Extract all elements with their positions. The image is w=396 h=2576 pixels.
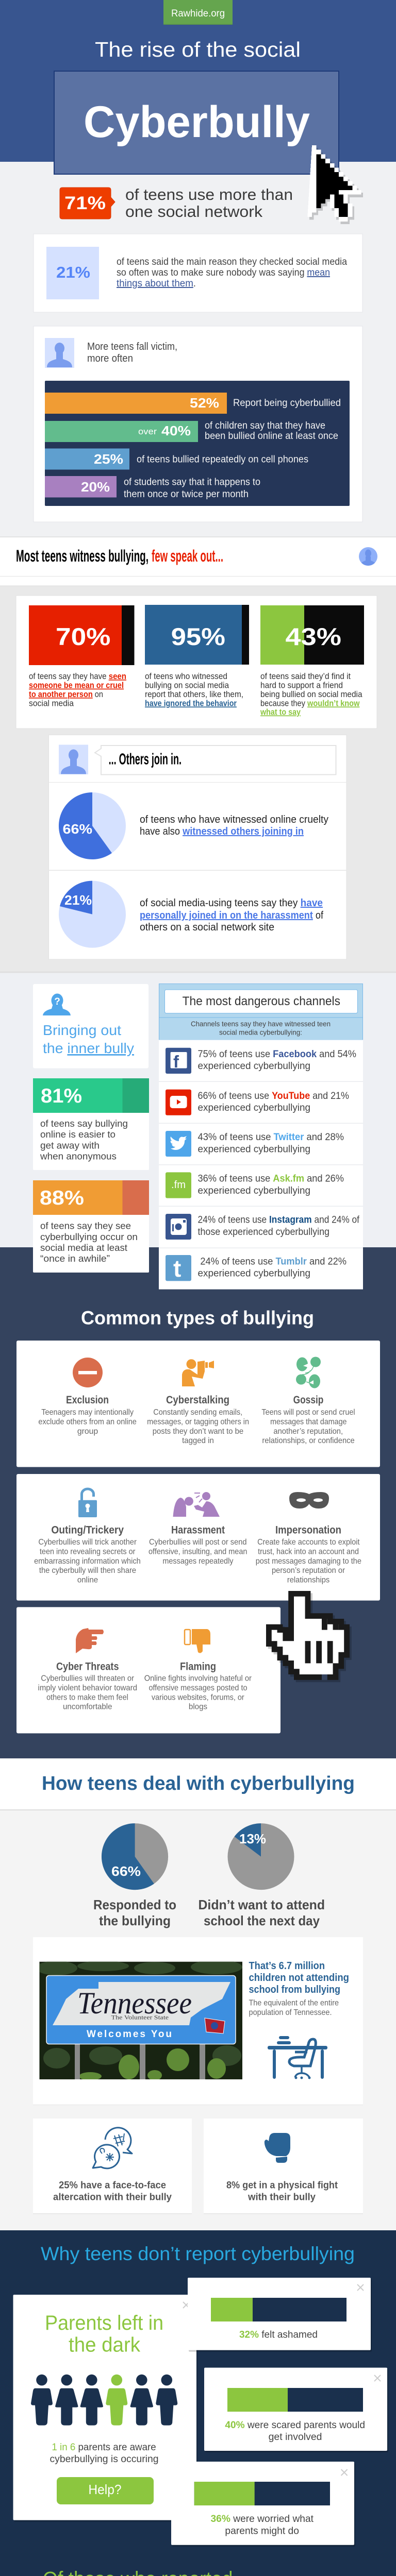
section: inner bully background — [0, 972, 396, 1248]
channel: Twitter — [166, 1131, 344, 1157]
stat card: 81 percent: get away with — [40, 1140, 100, 1150]
stat: 95 percent: 95% — [171, 623, 225, 650]
stat: 43 percent: being bullied on social media — [260, 690, 362, 699]
section: why teens don't report background — [0, 2230, 396, 2576]
text: physical fight — [226, 2179, 338, 2203]
channel: Ask.fm: experienced cyberbullying — [198, 1185, 310, 1196]
channels header — [159, 984, 363, 1040]
channels header: Channels teens say they have witnessed teen — [191, 1020, 331, 1028]
panel: physical fight — [204, 2119, 363, 2214]
text: flaming: offensive messages posted to — [148, 1684, 248, 1692]
channel: Twitter: 43% of teens use Twitter and 28% — [198, 1132, 344, 1143]
text: cyberstalking: Constantly sending emails, — [153, 1408, 242, 1417]
channels header: social media cyberbullying: — [219, 1028, 302, 1037]
icon: word of mouth — [296, 1357, 321, 1388]
title box: Cyberbully: Cyberbully — [84, 97, 310, 147]
pie chart: responded 66 percent: 66% — [111, 1863, 141, 1879]
section heading band: how teens deal — [0, 1758, 396, 1810]
panel: 21 percent card: 21% — [56, 263, 90, 281]
icon: arrow cursor — [307, 145, 363, 224]
panel: 21 percent card: so often was to make sure nobody was saying mean — [117, 267, 330, 278]
icon: unlocked padlock — [78, 1489, 97, 1517]
text: cyberstalking: posts they don’t want to be — [153, 1427, 243, 1436]
type: cyberstalking — [147, 1359, 249, 1445]
text: exclusion: Exclusion — [66, 1394, 109, 1406]
stat: 95 percent: have ignored the behavior — [145, 699, 237, 708]
brand tab: Rawhide.org — [171, 8, 225, 19]
type: cyber threats — [38, 1628, 137, 1711]
section: common types background — [0, 1247, 396, 1758]
channels list background — [159, 1040, 363, 1290]
title box: Cyberbully — [54, 71, 339, 174]
text: witnessed others joining in: of teens who have witnessed online cruelty — [140, 814, 328, 825]
icon: desk and chair — [268, 2036, 327, 2079]
pie chart: school avoidance 13 percent — [198, 1823, 325, 1928]
icon: abuse figures — [173, 1492, 220, 1517]
bar chart: victim rates: Report being cyberbullied — [233, 398, 341, 409]
channel: Ask.fm: .fm — [171, 1179, 186, 1191]
photo: Tennessee welcome sign: Tennessee — [77, 1986, 192, 2020]
text: cyber threats: imply violent behavior toward — [38, 1684, 137, 1692]
bar chart: victim rates: over — [138, 427, 157, 436]
panel: witness stats — [16, 596, 377, 728]
text: exclusion: Teenagers may intentionally — [41, 1408, 134, 1417]
icon: boxing glove — [265, 2133, 290, 2163]
stat text: more than one network — [125, 185, 293, 221]
channel: YouTube — [166, 1090, 349, 1115]
stat: 95 percent: bullying on social media — [145, 681, 229, 690]
pie chart: school avoidance 13 percent: Didn’t want to attend — [198, 1897, 325, 1912]
panel: 36 percent worried: 36% were worried what — [210, 2514, 314, 2524]
text: one in six parents: 1 in 6 parents are aware — [52, 2442, 156, 2453]
stat card: 81 percent: online is easier to — [40, 1129, 116, 1140]
panel: bullying types row 2 — [16, 1474, 380, 1601]
stat: 70 percent — [29, 605, 134, 708]
pie chart: 21 percent — [59, 881, 126, 948]
text: outing/trickery: Outing/Trickery — [51, 1524, 124, 1536]
icon: photographer — [182, 1359, 214, 1386]
channel: Instagram: 24% of teens use Instagram and 24% of — [198, 1215, 360, 1226]
text: 6.7 million children: The equivalent of the entire — [249, 1999, 339, 2007]
victims text: More teens fall victim, — [87, 341, 177, 352]
icon row: family of six — [31, 2375, 177, 2426]
channels header: The most dangerous channels — [183, 994, 340, 1008]
pie chart: responded 66 percent — [93, 1823, 176, 1928]
bar chart: victim rates: 20% — [81, 479, 110, 495]
text: outing/trickery: Cyberbullies will trick another — [38, 1538, 137, 1547]
text: outing/trickery: embarrassing information which — [34, 1557, 141, 1566]
heading: parents left in the dark: the dark — [69, 2334, 141, 2357]
text: outing/trickery: teen into revealing secrets or — [40, 1548, 136, 1556]
text: cyber threats: others to make them feel — [46, 1693, 128, 1702]
victims text — [87, 341, 177, 364]
bar chart: victim rates: 52% — [190, 395, 219, 411]
panel: bullying types row 1 — [16, 1341, 380, 1467]
stat: 71 percent badge: 71% — [64, 193, 106, 213]
icon: avatar — [59, 745, 88, 774]
panel: 40 percent scared parents: get involved — [269, 2432, 322, 2443]
text: 6.7 million children: children not attending — [249, 1972, 349, 1984]
panel: Tennessee comparison — [33, 1937, 363, 2105]
channel: Facebook: experienced cyberbullying — [198, 1061, 310, 1072]
channel: Facebook — [166, 1048, 356, 1074]
panel: most dangerous channels — [159, 984, 363, 1290]
text: 6.7 million children: population of Tennessee. — [249, 2008, 332, 2017]
text: face-to-face — [53, 2179, 172, 2203]
text: 6.7 million children: That’s 6.7 million — [249, 1960, 325, 1972]
text: outing/trickery — [34, 1524, 141, 1585]
panel: 32 percent felt ashamed: 32% felt ashamed — [239, 2330, 318, 2341]
brand tab — [163, 0, 233, 25]
stat: 43 percent: what to say — [260, 708, 301, 717]
text: cyber threats: Cyberbullies will threaten or — [41, 1674, 135, 1683]
panel: victims card — [34, 326, 362, 522]
stat card: 81 percent: of teens say bullying — [40, 1118, 128, 1129]
icon: pointing hand — [76, 1628, 104, 1653]
text: impersonation: Impersonation — [275, 1524, 341, 1536]
stat: 95 percent: of teens who witnessed — [145, 672, 227, 681]
bar chart: victim rates: been bullied online at least once — [205, 431, 338, 442]
icon: no entry — [73, 1358, 103, 1387]
speech bubble heading: ... Others join in. — [109, 750, 182, 768]
bar chart: victim rates: of children say that they have — [205, 420, 325, 431]
text: face-to-face: altercation with their bully — [53, 2192, 172, 2203]
stat text: more than one network: of teens use more than — [125, 185, 293, 204]
text: witnessed others joining in — [140, 814, 328, 837]
icon: thumbs down — [185, 1629, 210, 1653]
section: how teens deal background — [0, 1809, 396, 2230]
panel: 32 percent felt ashamed — [188, 2278, 372, 2352]
channel: Ask.fm — [166, 1172, 344, 1198]
type: harassment — [148, 1492, 248, 1566]
panel: 21 percent card — [34, 234, 362, 312]
photo: Tennessee welcome sign: Welcomes You — [87, 2029, 172, 2040]
text: physical fight: 8% get in a physical fight — [226, 2179, 338, 2191]
stat: 70 percent: 70% — [56, 623, 110, 650]
text: personally joined in: of social media-using teens say they have — [140, 897, 323, 909]
section: header background — [0, 0, 396, 162]
heading text — [43, 1022, 134, 1056]
bar chart: victim rates: of teens bullied repeatedly on cell phones — [137, 454, 308, 465]
title line: The rise of the social — [95, 38, 301, 61]
text: physical fight: with their bully — [248, 2192, 316, 2203]
icon: avatar — [45, 338, 74, 368]
icon: arguing speech bubbles — [93, 2128, 132, 2168]
stat card: 81 percent: when anonymous — [40, 1151, 117, 1161]
text: flaming: blogs — [189, 1703, 207, 1711]
text: gossip: another’s reputation, — [273, 1427, 343, 1436]
panel: others join in — [48, 735, 346, 959]
text: exclusion: exclude others from an online — [38, 1418, 137, 1427]
icon: mask — [289, 1492, 329, 1509]
stat: 43 percent — [260, 605, 364, 717]
stat card: 88 percent — [33, 1180, 149, 1273]
text: impersonation — [256, 1524, 361, 1585]
text: 6.7 million children: school from bullying — [249, 1984, 340, 1995]
stat: 95 percent: report that others, like them, — [145, 690, 243, 699]
pie chart: school avoidance 13 percent: school the next day — [204, 1913, 320, 1928]
heading text: Bringing out — [43, 1022, 121, 1038]
panel: 40 percent scared parents: 40% were scared parents would — [225, 2420, 365, 2431]
stat: 70 percent: someone be mean or cruel — [29, 681, 124, 690]
type: outing/trickery — [34, 1489, 141, 1585]
panel: bullying types row 3 — [16, 1607, 280, 1733]
heading: parents left in the dark: Parents left in — [45, 2312, 163, 2334]
channel: Instagram: those experienced cyberbullying — [198, 1227, 329, 1238]
stat: 70 percent: to another person on — [29, 690, 103, 699]
stat card: 81 percent — [33, 1078, 149, 1170]
button: help — [57, 2477, 154, 2504]
text: witnessed others joining in: have also witnessed others joining in — [140, 826, 304, 837]
heading: common types of bullying: Common types of bullying — [81, 1308, 314, 1329]
heading: why teens don't report: Why teens don’t report cyberbullying — [41, 2243, 355, 2264]
channel: Ask.fm: 36% of teens use Ask.fm and 26% — [198, 1174, 344, 1184]
text: cyberstalking: Cyberstalking — [166, 1394, 229, 1406]
photo: Tennessee welcome sign — [36, 1960, 242, 2080]
text: cyberstalking: tagged in — [182, 1436, 214, 1445]
victims text: more often — [87, 353, 133, 364]
text: impersonation: Create fake accounts to exploit — [257, 1538, 360, 1547]
stat card: 88 percent: social media at least — [40, 1242, 127, 1253]
text: exclusion: group — [77, 1427, 98, 1436]
text: face-to-face: 25% have a face-to-face — [59, 2179, 166, 2191]
stat: 43 percent: 43% — [286, 623, 341, 650]
text: cyberstalking: messages, or tagging others in — [147, 1418, 249, 1427]
pie chart: 21 percent: 21% — [64, 892, 92, 908]
stat: 43 percent: hard to support a friend — [260, 681, 343, 690]
stat: 43 percent: of teens said they’d find it — [260, 672, 351, 681]
text: cyber threats: Cyber Threats — [56, 1661, 119, 1673]
text: impersonation: relationships — [287, 1576, 329, 1585]
panel: 36 percent worried — [171, 2462, 355, 2547]
text: harassment: Harassment — [171, 1524, 225, 1536]
type: flaming — [144, 1629, 252, 1711]
text: flaming: various websites, forums, or — [152, 1693, 244, 1702]
stat card: 81 percent: 81% — [41, 1085, 82, 1107]
photo: Tennessee welcome sign: The Volunteer State — [111, 2013, 169, 2021]
channel: YouTube: experienced cyberbullying — [198, 1103, 310, 1113]
channel: YouTube: 66% of teens use YouTube and 21% — [198, 1091, 349, 1101]
text: impersonation: post messages damaging to the — [256, 1557, 361, 1566]
panel: 21 percent card: things about them. — [117, 278, 196, 289]
bar chart: victim rates: 25% — [94, 451, 123, 467]
text: one in six parents: cyberbullying is occuring — [50, 2454, 159, 2465]
channel: Tumblr: 24% of teens use Tumblr and 22% — [200, 1256, 346, 1267]
panel: parents left in the dark — [13, 2295, 197, 2522]
stat card: 88 percent: 88% — [40, 1187, 84, 1209]
text: 6.7 million children — [249, 1960, 349, 2017]
stat: 95 percent — [145, 605, 249, 708]
text: harassment: offensive, insulting, and mean — [148, 1548, 248, 1556]
panel: 40 percent scared parents — [204, 2368, 388, 2452]
text: impersonation: trust, hack into an account and — [258, 1548, 359, 1556]
close mark — [183, 2302, 189, 2308]
panel: 21 percent card: of teens said the main reason they checked social media — [117, 257, 347, 267]
text: exclusion — [38, 1394, 137, 1436]
text: flaming: Flaming — [180, 1661, 216, 1673]
icon: head with question mark: ? — [54, 996, 60, 1007]
bar chart: victim rates: 40% — [161, 423, 191, 438]
channel: Twitter: experienced cyberbullying — [198, 1144, 310, 1155]
section heading band: most teens witness bullying: Most teens witness bullying, — [16, 547, 148, 565]
stat: 43 percent: because they wouldn’t know — [260, 699, 360, 708]
pie chart: school avoidance 13 percent: 13% — [239, 1831, 266, 1846]
text: cyber threats: uncomfortable — [63, 1703, 112, 1711]
text: personally joined in: others on a social network site — [140, 922, 274, 933]
panel: face-to-face altercation — [33, 2119, 192, 2214]
icon: round avatar — [359, 547, 377, 567]
text: personally joined in: personally joined in on the harassment of — [140, 910, 323, 921]
pie chart: 66 percent — [59, 792, 126, 859]
icon: head with question mark — [43, 993, 71, 1015]
text: gossip: messages that damage — [270, 1418, 347, 1427]
text: flaming: Online fights involving hateful or — [144, 1674, 252, 1683]
icon: pixel hand cursor — [269, 1594, 349, 1680]
text: gossip: relationships, or confidence — [262, 1436, 355, 1445]
section heading band: most teens witness bullying: few speak out... — [152, 547, 223, 565]
text: gossip: Teens will post or send cruel — [261, 1408, 355, 1417]
stat: 70 percent: social media — [29, 699, 74, 708]
text: harassment — [148, 1524, 248, 1566]
stat: 70 percent: of teens say they have seen — [29, 672, 126, 681]
type: impersonation — [256, 1492, 361, 1585]
type: gossip — [261, 1357, 355, 1445]
text: gossip — [261, 1394, 355, 1445]
stat text: more than one network: one social network — [125, 202, 263, 221]
section heading band: most teens witness bullying — [0, 537, 396, 586]
text: one in six parents — [50, 2442, 159, 2465]
pie chart: 66 percent: 66% — [63, 821, 92, 837]
panel: bringing out the inner bully — [33, 984, 148, 1069]
text: personally joined in — [140, 897, 323, 933]
channel: Facebook: 75% of teens use Facebook and 54% — [198, 1049, 356, 1060]
pie chart: responded 66 percent: the bullying — [99, 1913, 171, 1928]
speech bubble heading — [95, 745, 336, 775]
stat card: 88 percent: of teens say they see — [40, 1221, 131, 1231]
channel: Tumblr: experienced cyberbullying — [198, 1268, 310, 1279]
button: help: Help? — [88, 2482, 122, 2497]
bar chart: victim rates — [45, 381, 350, 506]
text: gossip: Gossip — [293, 1394, 323, 1406]
type: exclusion — [38, 1358, 137, 1436]
bar chart: victim rates: them once or twice per month — [124, 489, 249, 500]
text: outing/trickery: online — [77, 1576, 98, 1585]
heading: parents left in the dark — [45, 2312, 163, 2357]
pie chart: responded 66 percent: Responded to — [93, 1897, 176, 1912]
section: intro background — [0, 162, 396, 537]
text: cyber threats — [38, 1661, 137, 1711]
channel: Tumblr: t — [173, 1255, 181, 1282]
stat card: 88 percent: cyberbullying occur on — [40, 1231, 138, 1242]
section: witness background — [0, 586, 396, 972]
text: cyberstalking — [147, 1394, 249, 1445]
text: flaming — [144, 1661, 252, 1711]
channel: Tumblr — [166, 1255, 346, 1282]
text: harassment: messages repeatedly — [162, 1557, 233, 1566]
stat card: 88 percent: “once in awhile” — [40, 1253, 110, 1264]
text: impersonation: person’s reputation or — [272, 1566, 345, 1575]
heading text: the inner bully — [43, 1040, 134, 1056]
text: outing/trickery: the cyberbully will then share — [39, 1566, 136, 1575]
channel: Facebook: f — [173, 1052, 179, 1071]
panel: 36 percent worried: parents might do — [225, 2526, 299, 2537]
channel: Instagram — [166, 1214, 360, 1240]
stat: 71 percent badge — [60, 188, 115, 219]
text: harassment: Cyberbullies will post or send — [149, 1538, 246, 1547]
section heading band: how teens deal: How teens deal with cyberbullying — [42, 1773, 355, 1794]
bar chart: victim rates: of students say that it happens to — [124, 477, 260, 487]
